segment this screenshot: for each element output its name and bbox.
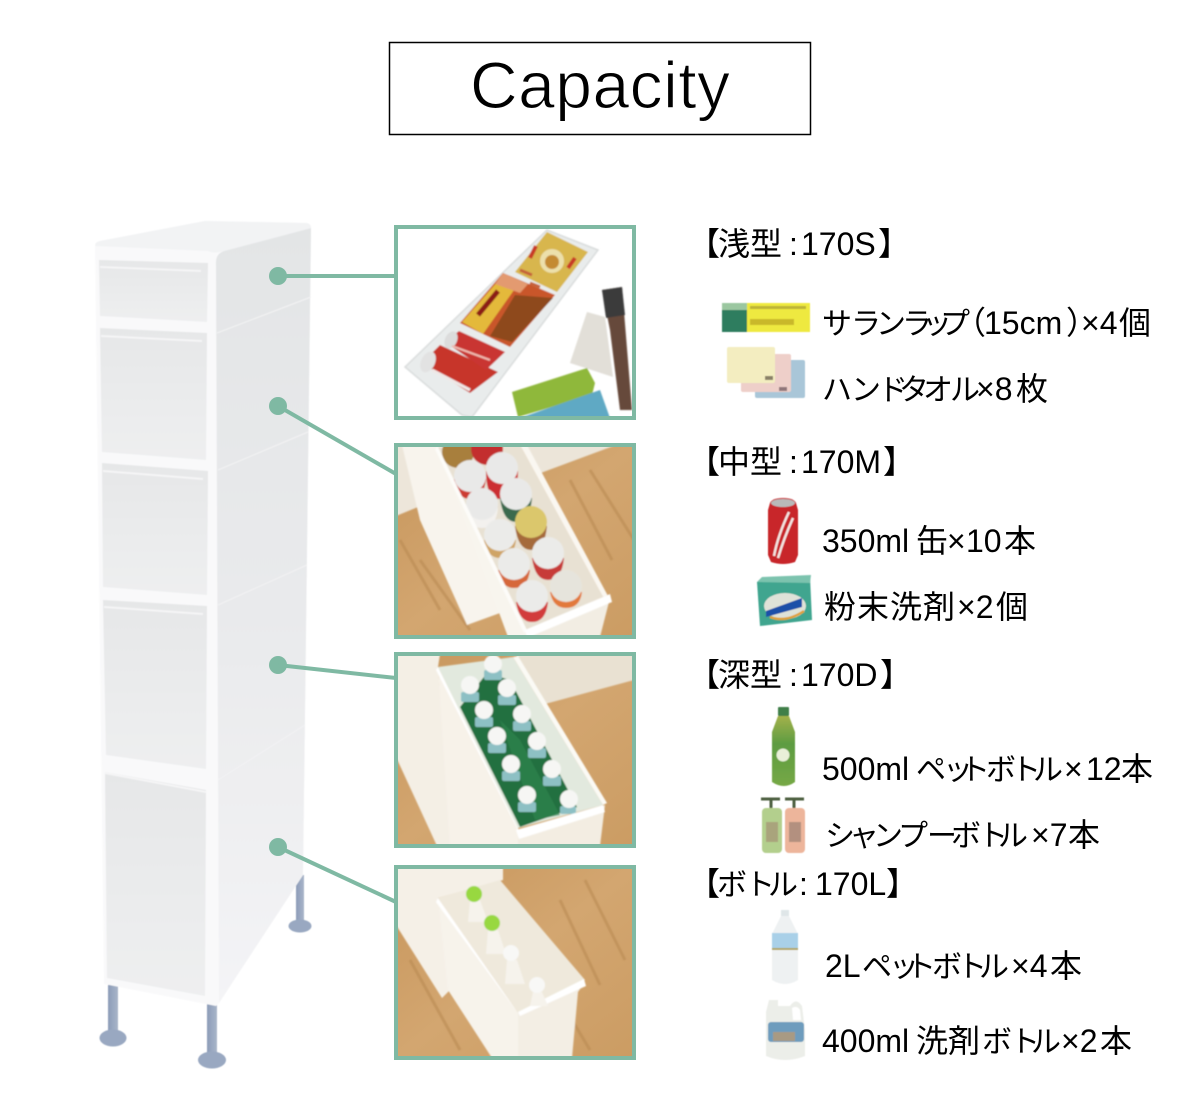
icon: detergent box: [757, 575, 812, 626]
noodle pack: [515, 232, 588, 292]
back wall: [516, 654, 634, 704]
drawer 4: [103, 600, 207, 769]
item label: plastic wrap: 個: [1119, 305, 1151, 341]
heading: 】: [886, 866, 918, 902]
section: deep drawer 170D: [688, 657, 1153, 853]
drawer 3: [102, 463, 208, 595]
heading: ボトル: [717, 869, 798, 902]
drawer side: [438, 898, 518, 1058]
item label: plastic wrap: ×4: [1081, 305, 1117, 341]
drawer front: [532, 603, 610, 635]
photo panel: shallow tray: [396, 227, 634, 418]
heading: 深型: [718, 657, 782, 693]
item label: detergent bottles: ボトル: [982, 1026, 1061, 1059]
plastic bottles: [466, 886, 548, 1006]
heading: 【: [688, 444, 720, 480]
item label: detergent bottles: 洗剤: [916, 1023, 980, 1059]
item label: plastic wrap: ）: [1066, 305, 1098, 341]
cabinet: [402, 445, 500, 625]
connector: top drawer: [269, 267, 396, 285]
heading: 【: [688, 866, 720, 902]
drawer 1: [99, 260, 208, 322]
item label: detergent bottles: 400ml: [822, 1023, 909, 1059]
cabinet legs: [100, 875, 312, 1068]
item label: shampoo bottles: 本: [1068, 817, 1100, 853]
heading: :: [789, 657, 798, 693]
icon: soda can: [768, 498, 798, 564]
item label: cans: ×: [947, 523, 966, 559]
drawer interior: [438, 657, 603, 828]
photo panel: bottle drawer: [396, 867, 634, 1058]
item label: hand towels: ×8: [976, 371, 1012, 407]
item label: cans: 本: [1004, 523, 1036, 559]
photo panel: bottles in deep drawer: [396, 654, 634, 846]
heading: 170M: [801, 444, 881, 480]
heading: 170L: [815, 866, 886, 902]
icon: hand towels: [727, 347, 805, 398]
heading: 170D: [801, 657, 878, 693]
item label: 2L bottles: ペットボトル: [862, 951, 1009, 984]
drawer front: [517, 988, 581, 1056]
item label: detergent powder: 粉末洗剤: [824, 589, 955, 625]
illustration: white storage cabinet: [95, 221, 312, 1068]
drawer front: [518, 805, 605, 846]
item label: 2L bottles: 2L: [825, 948, 861, 984]
connector: second drawer: [269, 397, 396, 474]
item label: PET bottles: ペットボトル: [916, 754, 1063, 787]
item label: hand towels: 枚: [1016, 371, 1048, 407]
heading: 【: [688, 657, 720, 693]
item label: detergent powder: 個: [996, 589, 1028, 625]
item label: 2L bottles: 本: [1050, 948, 1082, 984]
item label: PET bottles: 12: [1086, 751, 1122, 787]
item label: 2L bottles: ×4: [1011, 948, 1047, 984]
icon: tea bottle: [772, 707, 795, 786]
item label: detergent bottles: ×2: [1061, 1023, 1097, 1059]
connector lines: [269, 267, 396, 902]
connector: third drawer: [269, 656, 396, 678]
heading: 中型: [718, 444, 782, 480]
item label: shampoo bottles: シャンプーボトル: [825, 820, 1028, 853]
drawer interior: [438, 880, 585, 1013]
cabinet side panel: [216, 228, 311, 1003]
foil pack: [570, 312, 613, 377]
cabinet: [396, 867, 503, 998]
item label: cans: 缶: [916, 523, 948, 559]
drawer side: [473, 528, 527, 635]
heading: 【: [688, 226, 720, 262]
red cans: [417, 329, 505, 393]
cooking sheet: [602, 287, 632, 410]
icon: plastic wrap box: [722, 303, 810, 332]
item label: cans: 10: [966, 523, 1002, 559]
drawer 2: [100, 328, 207, 460]
section: medium drawer 170M: [688, 444, 1036, 626]
item label: PET bottles: ×: [1064, 751, 1083, 787]
back wall: [527, 447, 613, 474]
heading: 】: [880, 657, 912, 693]
cabinet top: [95, 221, 311, 252]
heading: 170S: [801, 226, 876, 262]
heading: 】: [878, 226, 910, 262]
item label: detergent powder: ×2: [957, 589, 993, 625]
connector: bottom drawer: [269, 838, 396, 902]
item label: hand towels: ハンドタオル: [822, 374, 980, 407]
green towel: [512, 368, 595, 417]
item label: cans: 350ml: [822, 523, 909, 559]
icon: shampoo bottles: [761, 799, 805, 853]
cabinet joint lines: [217, 297, 311, 780]
section: shallow drawer 170S: [688, 226, 1151, 407]
title: [390, 42, 810, 134]
icon: detergent bottle: [766, 1000, 805, 1060]
item label: shampoo bottles: ×7: [1031, 817, 1067, 853]
cabinet body: [95, 221, 311, 1006]
cabinet: [396, 654, 452, 846]
title: Capacity: [470, 48, 730, 122]
drawer handles: [100, 267, 206, 792]
drink cans: [442, 433, 582, 622]
item label: PET bottles: 本: [1121, 751, 1153, 787]
clear tray: [405, 230, 598, 417]
drawer 5: [105, 772, 206, 996]
drawer side: [438, 667, 519, 846]
green bottles: [460, 655, 578, 827]
section: bottle drawer 170L: [688, 866, 1132, 1060]
blue towel: [520, 390, 610, 418]
item label: plastic wrap: （: [954, 305, 986, 341]
heading: 】: [883, 444, 915, 480]
heading: :: [789, 226, 798, 262]
drawer interior: [438, 445, 603, 630]
heading: :: [789, 444, 798, 480]
heading: 浅型: [718, 226, 782, 262]
curry boxes: [460, 273, 555, 347]
item label: PET bottles: 500ml: [822, 751, 909, 787]
icon: water bottle: [772, 910, 798, 984]
item label: detergent bottles: 本: [1100, 1023, 1132, 1059]
heading: :: [799, 866, 808, 902]
item label: plastic wrap: サランラップ: [822, 308, 970, 341]
item label: plastic wrap: 15cm: [984, 305, 1062, 341]
photo panel: cans in medium drawer: [396, 433, 634, 638]
